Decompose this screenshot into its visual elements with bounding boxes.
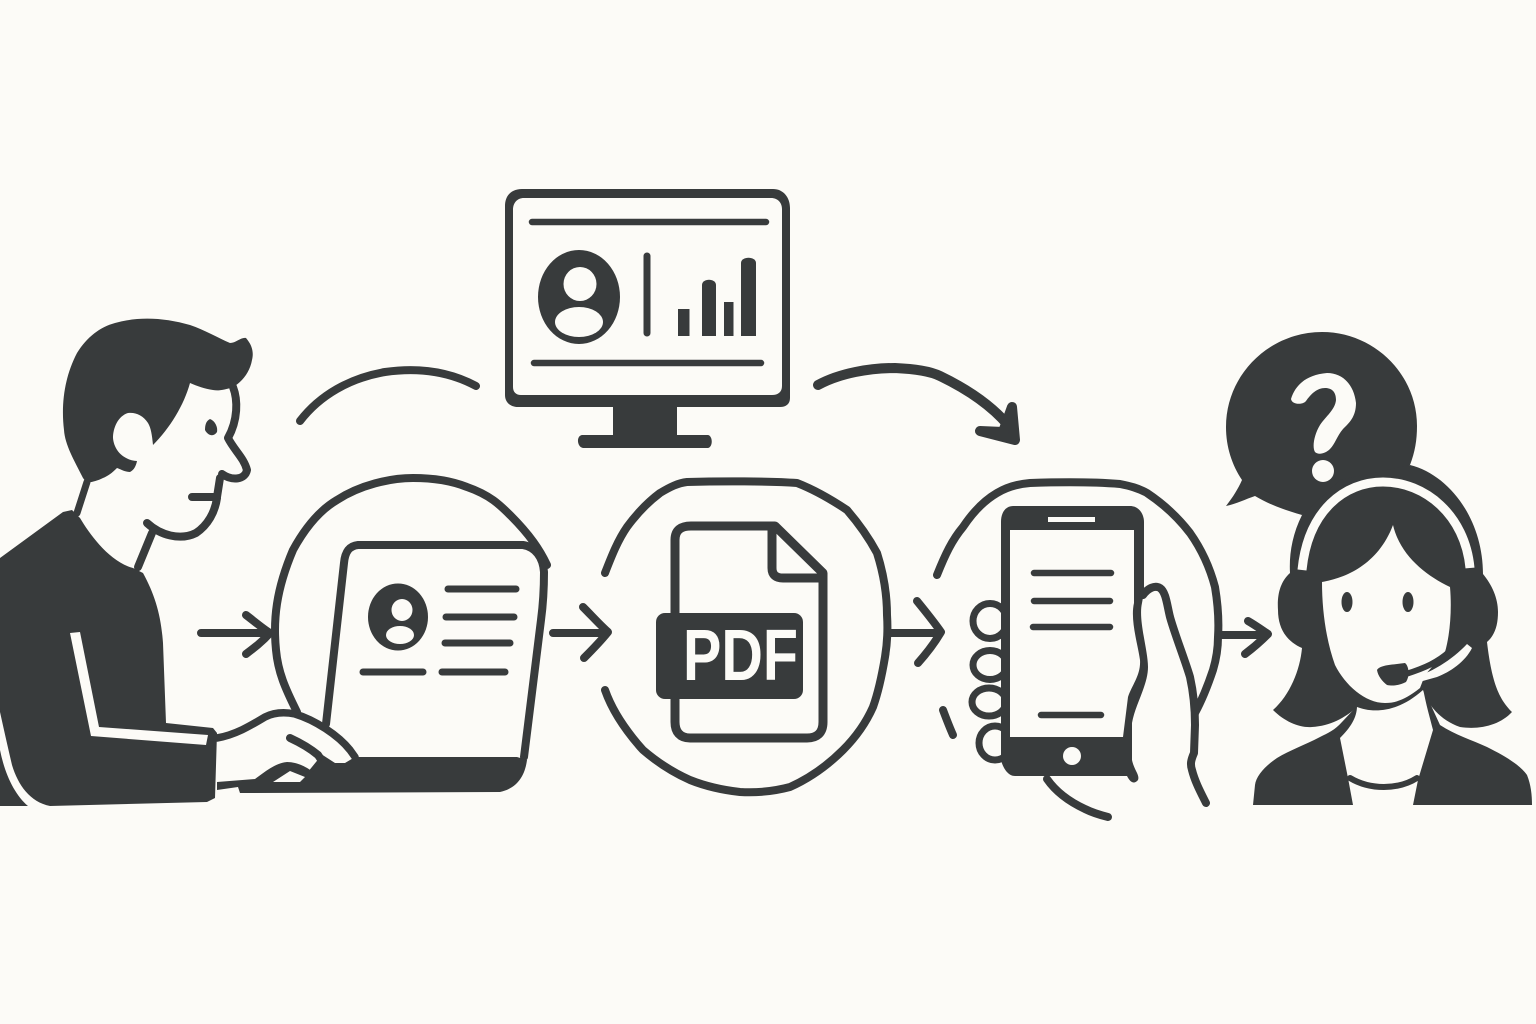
phone in hand [937, 482, 1218, 817]
man: face profile [222, 387, 247, 479]
wrist curve [1047, 779, 1108, 817]
man: mouth and chin [147, 478, 220, 537]
laptop base and keyboard [217, 752, 527, 793]
man: sleeve highlight [70, 632, 208, 745]
man: torso [0, 510, 217, 806]
circle outline [275, 478, 547, 712]
eyes [1342, 592, 1414, 612]
phone screen [1010, 530, 1140, 737]
left shoulder [1253, 706, 1357, 805]
thumb and wrist [1143, 587, 1206, 803]
question mark [1291, 373, 1356, 482]
monitor frame [505, 189, 790, 407]
arrow: man to document [201, 615, 270, 654]
avatar [538, 250, 620, 344]
arrow: curve towards monitor [300, 370, 476, 421]
PDF label: PDF [683, 616, 798, 696]
man: finger line [290, 738, 322, 772]
circle outline [605, 481, 887, 792]
microphone [1377, 663, 1409, 686]
PDF label [656, 613, 803, 699]
arrow: phone to support agent [1221, 621, 1268, 654]
man at laptop [0, 319, 355, 806]
monitor stand [578, 406, 712, 448]
keyboard gap between fingers [273, 771, 305, 782]
mic boom [1406, 652, 1449, 674]
collar [1350, 778, 1417, 787]
laptop document circle [217, 478, 547, 793]
bar chart [647, 256, 756, 336]
speech bubble [1226, 332, 1417, 515]
right shoulder [1413, 688, 1532, 805]
laptop screen [326, 545, 544, 757]
document text lines [363, 589, 516, 672]
screen lines [532, 222, 766, 363]
arrow: curve from monitor to phone [818, 368, 1015, 440]
arrow: document to PDF [553, 607, 608, 658]
circle outline [937, 482, 1218, 713]
PDF circle [605, 481, 887, 792]
phone text lines [1033, 573, 1111, 715]
broken circle dash [943, 710, 953, 735]
phone speaker [1048, 517, 1095, 522]
profile avatar [368, 584, 428, 650]
man: lower back patch [0, 750, 28, 806]
phone body and thumb mass [1001, 506, 1148, 783]
arrow: PDF to phone [889, 601, 941, 663]
face [1322, 525, 1451, 703]
man: hand outline [217, 713, 355, 757]
hair and headset silhouette [1273, 465, 1512, 728]
mic boom highlight [1410, 644, 1472, 684]
man: back of neck [77, 482, 87, 513]
phone home button [1063, 747, 1081, 765]
headset band [1302, 482, 1470, 570]
PDF file outline [675, 526, 823, 738]
man: front of neck [138, 533, 152, 567]
man: hair [63, 319, 253, 482]
fingers [972, 604, 1011, 760]
monitor [505, 189, 790, 448]
support agent [1226, 332, 1532, 805]
man: eye [205, 419, 217, 435]
PDF folded corner [772, 530, 820, 578]
